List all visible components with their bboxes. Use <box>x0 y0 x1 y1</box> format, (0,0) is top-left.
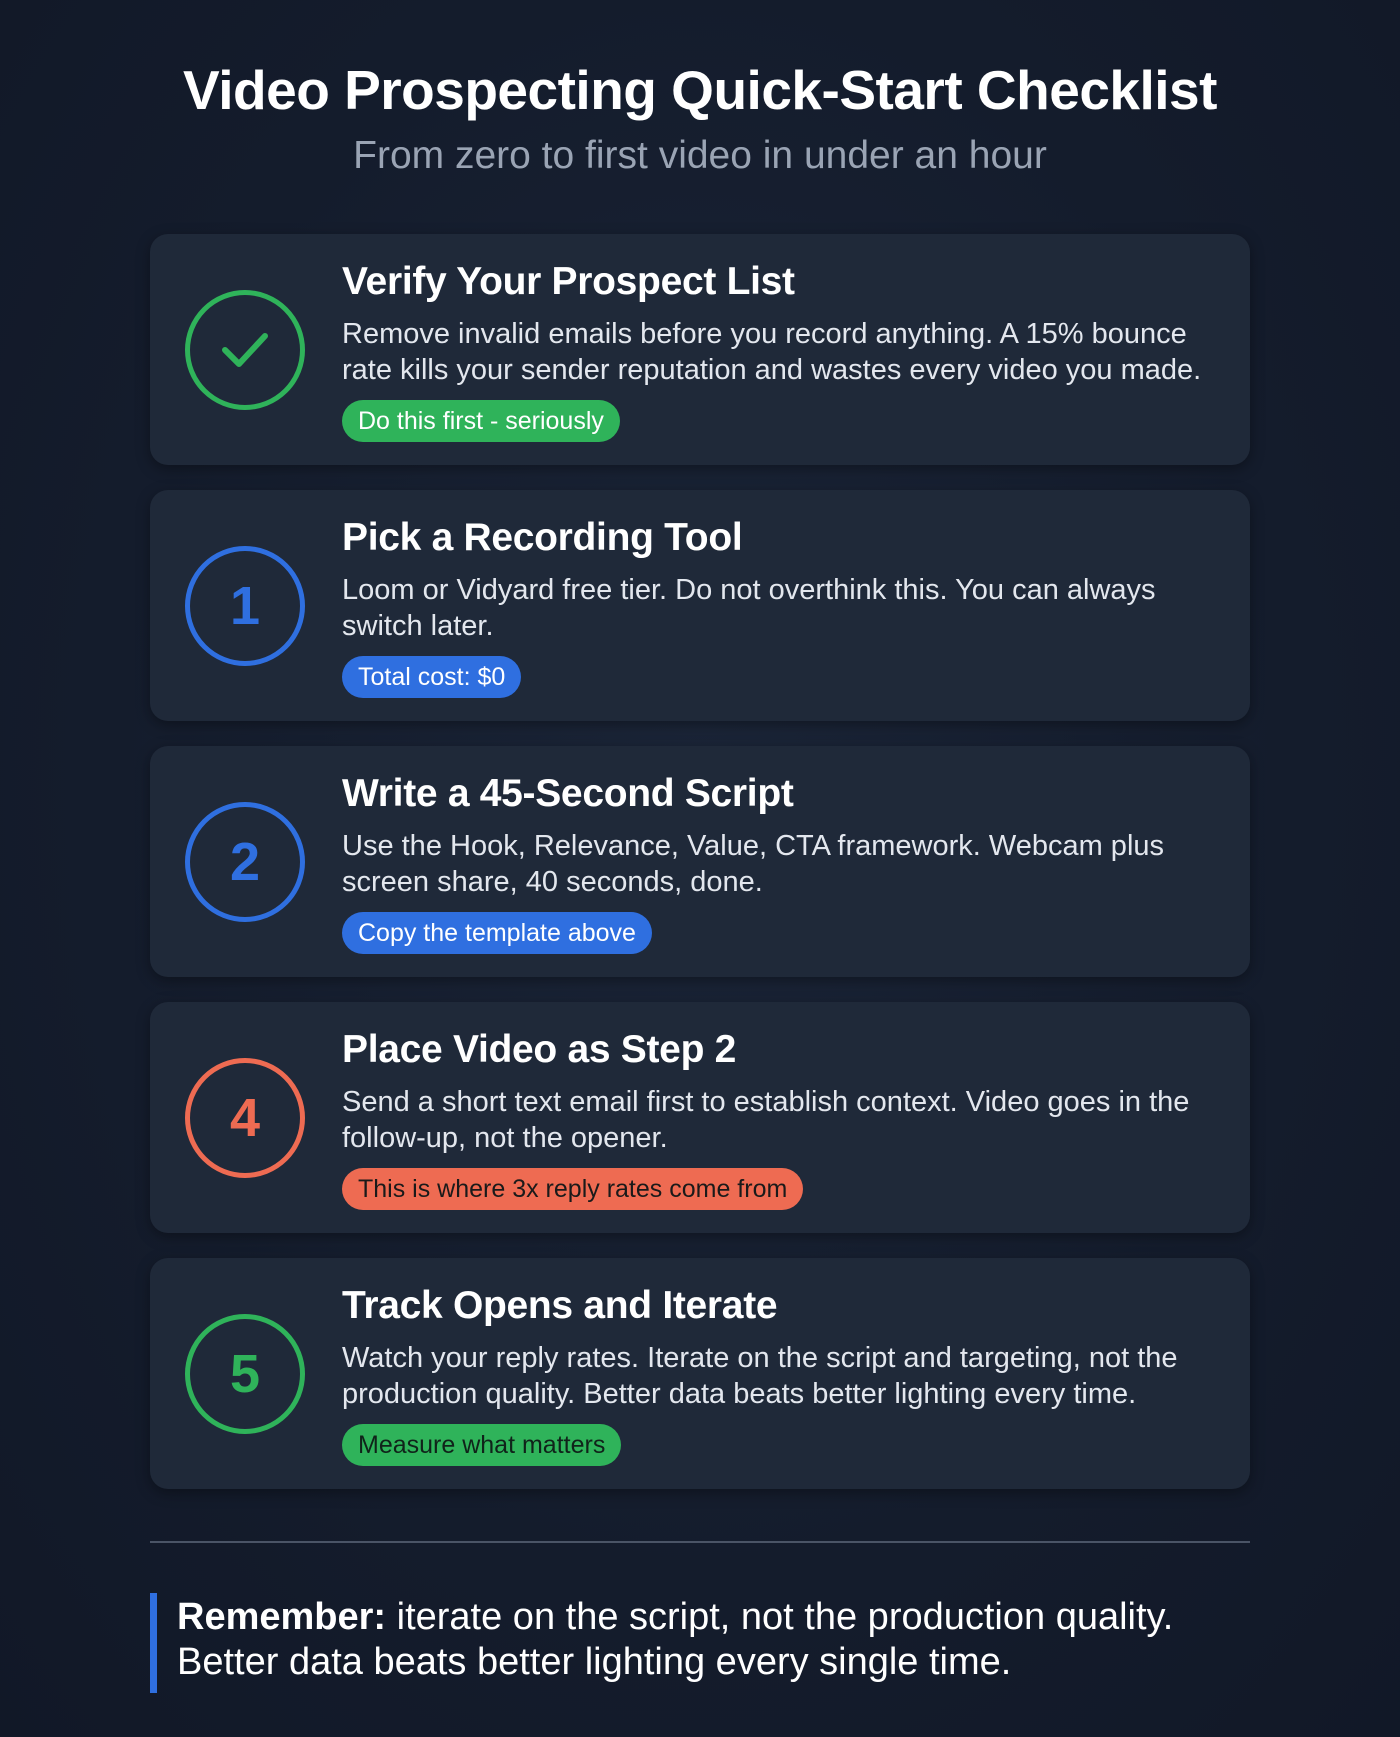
icon: number 4 <box>185 1058 305 1178</box>
icon: number 2 <box>185 802 305 922</box>
pill: Copy the template above <box>358 919 636 947</box>
pill <box>342 400 620 442</box>
heading: Track Opens and Iterate <box>342 1284 777 1327</box>
pill: This is where 3x reply rates come from <box>358 1175 787 1203</box>
icon: check circle <box>185 290 305 410</box>
callout: remember: Better data beats better lighting every single time. <box>177 1641 1011 1683</box>
icon: number 5: 5 <box>230 1344 260 1404</box>
heading: Place Video as Step 2 <box>342 1028 736 1071</box>
panel: track opens <box>150 1258 1250 1489</box>
heading: Verify Your Prospect List <box>342 260 795 303</box>
heading: Write a 45-Second Script <box>342 772 794 815</box>
icon: number 5 <box>185 1314 305 1434</box>
panel: recording tool <box>150 490 1250 721</box>
pill <box>342 1424 621 1466</box>
pill: Total cost: $0 <box>358 663 505 691</box>
icon: number 4: 4 <box>230 1088 260 1148</box>
panel: place video <box>150 1002 1250 1233</box>
pill <box>342 656 521 698</box>
pill <box>342 912 652 954</box>
text: Remove invalid emails before you record anything. A 15% bounce rate kills your sender reputation and wastes every video you made. <box>342 318 1201 386</box>
title: Video Prospecting Quick-Start Checklist <box>183 59 1217 121</box>
pill <box>342 1168 803 1210</box>
icon: number 2: 2 <box>230 832 260 892</box>
pill: Measure what matters <box>358 1431 605 1459</box>
text: Send a short text email first to establish context. Video goes in the follow-up, not the opener. <box>342 1086 1189 1154</box>
text: Use the Hook, Relevance, Value, CTA framework. Webcam plus screen share, 40 seconds, done. <box>342 830 1164 898</box>
callout: remember: Remember: iterate on the script, not the production quality. <box>177 1596 1173 1638</box>
callout: remember <box>150 1593 1173 1693</box>
text: Watch your reply rates. Iterate on the script and targeting, not the production quality. Better data beats better lighting every time. <box>342 1342 1178 1410</box>
heading: Pick a Recording Tool <box>342 516 742 559</box>
panel: script <box>150 746 1250 977</box>
icon: number 1 <box>185 546 305 666</box>
panel: verify prospect list <box>150 234 1250 465</box>
icon: number 1: 1 <box>230 576 260 636</box>
text: Loom or Vidyard free tier. Do not overthink this. You can always switch later. <box>342 574 1156 642</box>
pill: Do this first - seriously <box>358 407 604 435</box>
subtitle: From zero to first video in under an hour <box>353 134 1047 177</box>
